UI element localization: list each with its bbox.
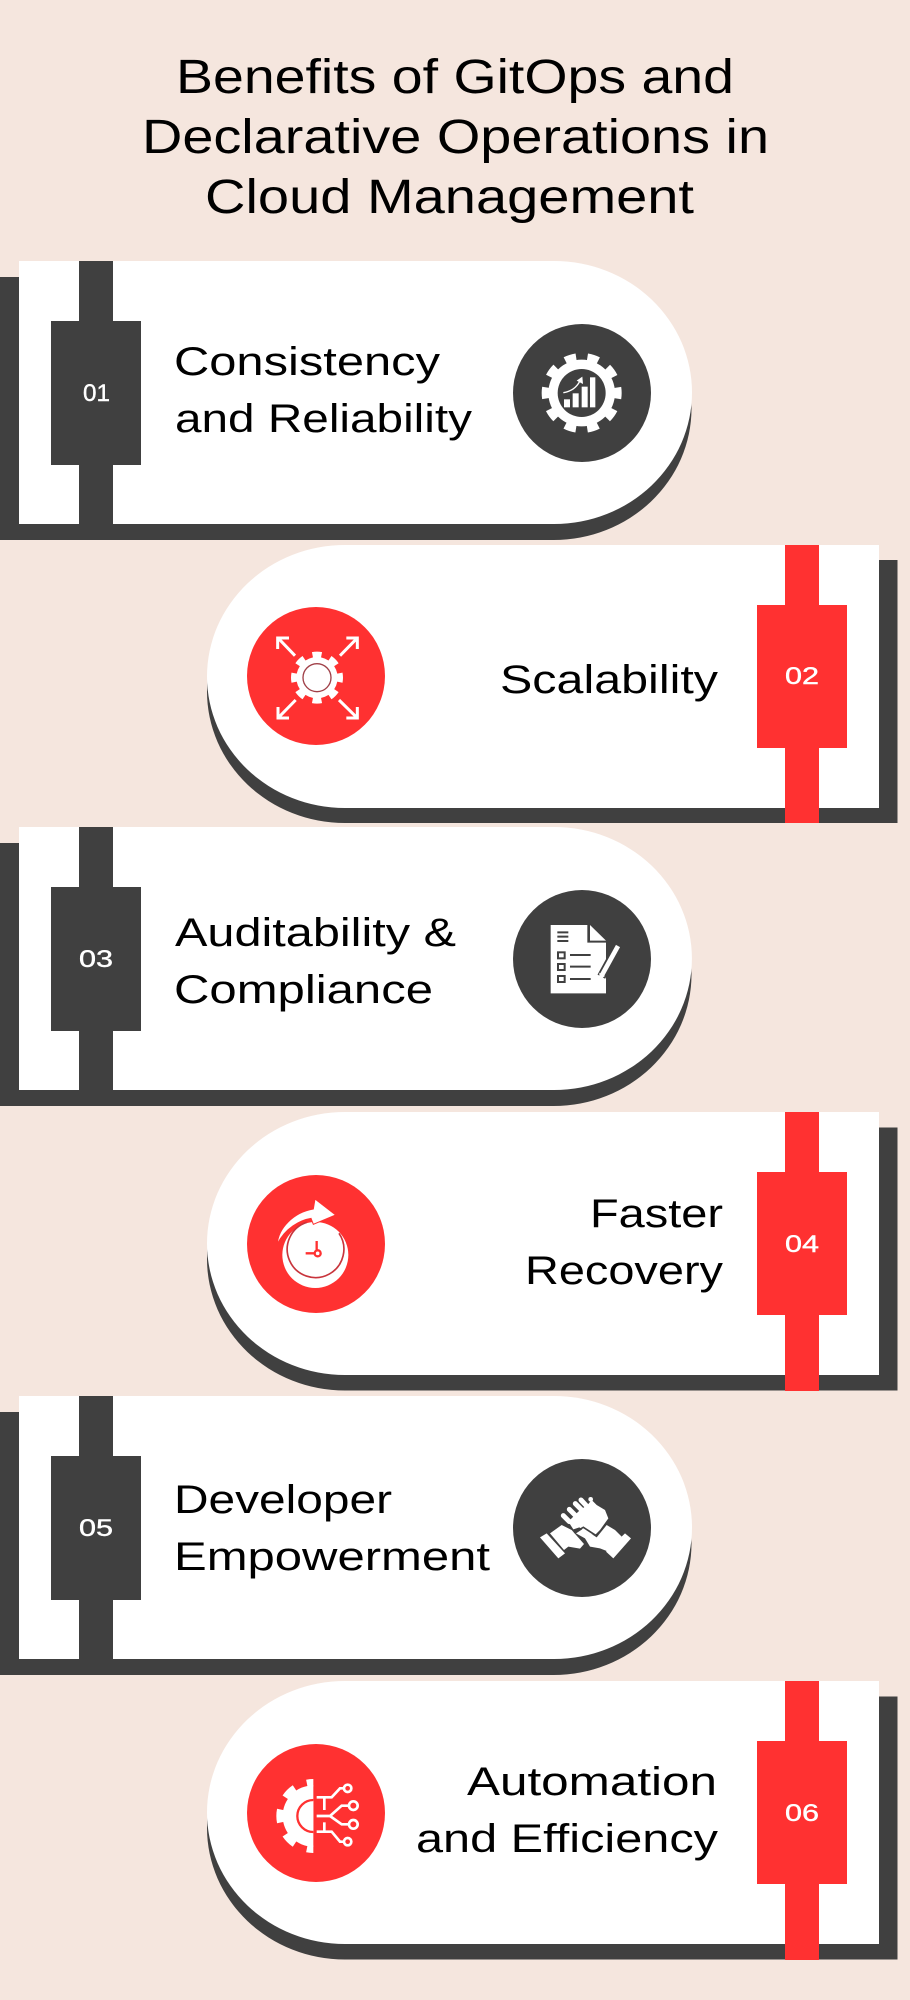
heading: consistency and reliability: Consistency bbox=[174, 340, 440, 384]
heading: faster recovery: Faster bbox=[590, 1192, 723, 1236]
heading: faster recovery: Recovery bbox=[525, 1249, 723, 1293]
heading: scalability: Scalability bbox=[500, 658, 718, 702]
icon: checklist document and pencil bbox=[513, 890, 651, 1028]
icon: gear with expanding arrows bbox=[247, 607, 385, 745]
number 04: 04 bbox=[785, 1231, 819, 1258]
heading: consistency and reliability: and Reliability bbox=[175, 397, 472, 441]
heading: auditability and compliance: Auditability & bbox=[175, 911, 456, 955]
heading: automation and efficiency: and Efficiency bbox=[416, 1817, 718, 1861]
panel: 06 automation and efficiency bbox=[207, 1681, 898, 1960]
number 06: 06 bbox=[785, 1800, 819, 1827]
icon: half gear with circuit bbox=[247, 1744, 385, 1882]
title: Cloud Management bbox=[205, 171, 694, 224]
panel: 05 developer empowerment bbox=[0, 1396, 692, 1675]
title bbox=[142, 51, 769, 224]
title: Benefits of GitOps and bbox=[176, 51, 734, 104]
heading: developer empowerment: Developer bbox=[174, 1478, 392, 1522]
icon: gear with bar chart bbox=[513, 324, 651, 462]
icon: clock with forward arrow bbox=[247, 1175, 385, 1313]
number 03: 03 bbox=[79, 946, 113, 973]
heading: automation and efficiency: Automation bbox=[467, 1760, 717, 1804]
heading: auditability and compliance: Compliance bbox=[174, 968, 433, 1012]
heading: developer empowerment: Empowerment bbox=[174, 1535, 490, 1579]
number 02: 02 bbox=[785, 663, 819, 690]
title: Declarative Operations in bbox=[142, 111, 769, 164]
heading: automation and efficiency bbox=[416, 1760, 718, 1861]
panel: 01 consistency and reliability bbox=[0, 261, 692, 540]
number 01: 01 bbox=[83, 380, 110, 407]
panel: 04 faster recovery bbox=[207, 1112, 898, 1391]
panel: 03 auditability and compliance bbox=[0, 827, 692, 1106]
number 05: 05 bbox=[79, 1515, 113, 1542]
heading: faster recovery bbox=[525, 1192, 723, 1293]
icon: handshake bbox=[513, 1459, 651, 1597]
heading: consistency and reliability bbox=[174, 340, 472, 441]
heading: auditability and compliance bbox=[174, 911, 456, 1012]
panel: 02 scalability bbox=[207, 545, 898, 823]
heading: developer empowerment bbox=[174, 1478, 490, 1579]
